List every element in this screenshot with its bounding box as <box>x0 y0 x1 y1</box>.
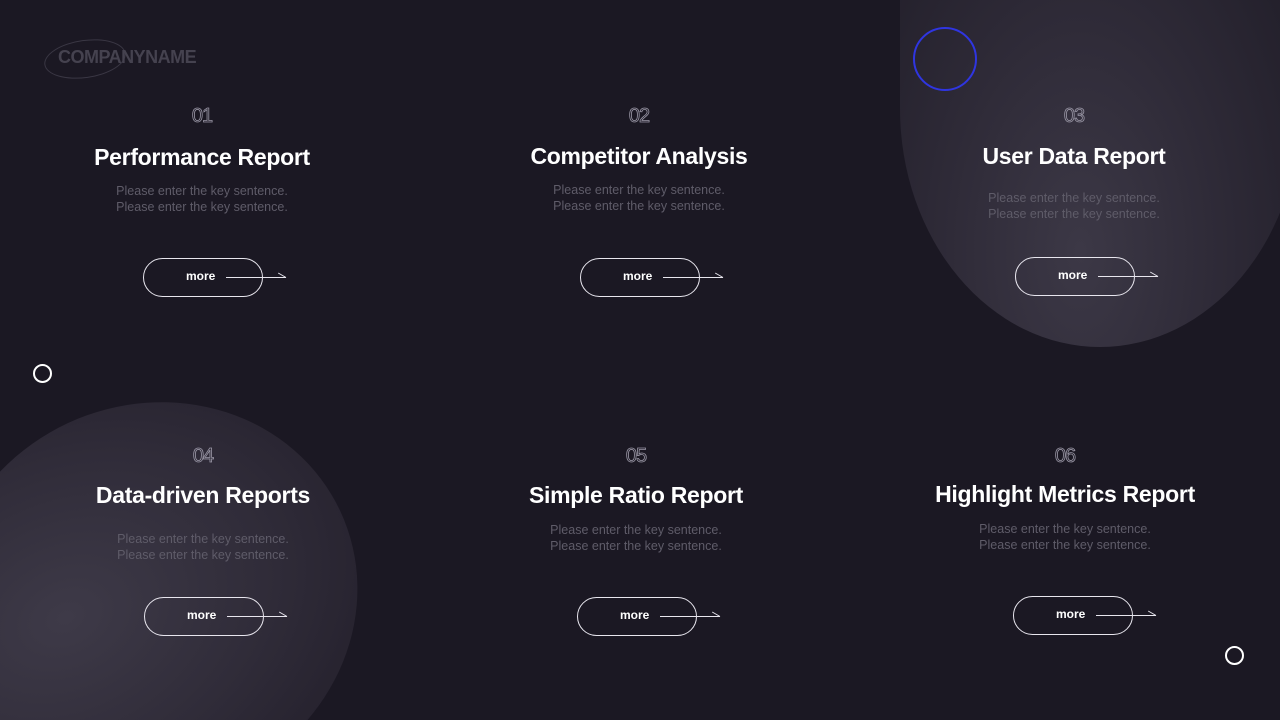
card 05: more <box>620 608 649 622</box>
card 04: more <box>187 608 216 622</box>
card 01: more <box>186 269 215 283</box>
card 03: more <box>1058 268 1087 282</box>
card 04: Please enter the key sentence. <box>117 532 289 546</box>
card 05: Simple Ratio Report <box>529 482 743 508</box>
card 01: Performance Report <box>94 144 310 170</box>
card 01: Please enter the key sentence. <box>116 184 288 198</box>
card 03: Please enter the key sentence. <box>988 207 1160 221</box>
card 03 <box>982 108 1166 296</box>
card 04 <box>96 448 310 636</box>
card 04: Data-driven Reports <box>96 482 310 508</box>
logo: COMPANYNAME <box>58 47 196 67</box>
card 05: Please enter the key sentence. <box>550 539 722 553</box>
card 06: Please enter the key sentence. <box>979 522 1151 536</box>
card 05 <box>529 448 743 636</box>
card 06 <box>935 448 1195 635</box>
card 06: Highlight Metrics Report <box>935 481 1195 507</box>
small circle left <box>33 364 52 383</box>
blue circle <box>913 27 977 91</box>
card 02 <box>530 108 748 297</box>
card 01 <box>94 108 310 297</box>
card 05: Please enter the key sentence. <box>550 523 722 537</box>
card 02: Competitor Analysis <box>530 143 748 169</box>
card 04: Please enter the key sentence. <box>117 548 289 562</box>
card 03: Please enter the key sentence. <box>988 191 1160 205</box>
photo: server room <box>900 0 1280 347</box>
card 02: Please enter the key sentence. <box>553 183 725 197</box>
small circle right <box>1225 646 1244 665</box>
card 06: Please enter the key sentence. <box>979 538 1151 552</box>
card 06: more <box>1056 607 1085 621</box>
card 02: more <box>623 269 652 283</box>
card 02: Please enter the key sentence. <box>553 199 725 213</box>
photo: hand writing <box>0 335 423 720</box>
card 01: Please enter the key sentence. <box>116 200 288 214</box>
card 03: User Data Report <box>982 143 1166 169</box>
logo <box>44 40 196 78</box>
